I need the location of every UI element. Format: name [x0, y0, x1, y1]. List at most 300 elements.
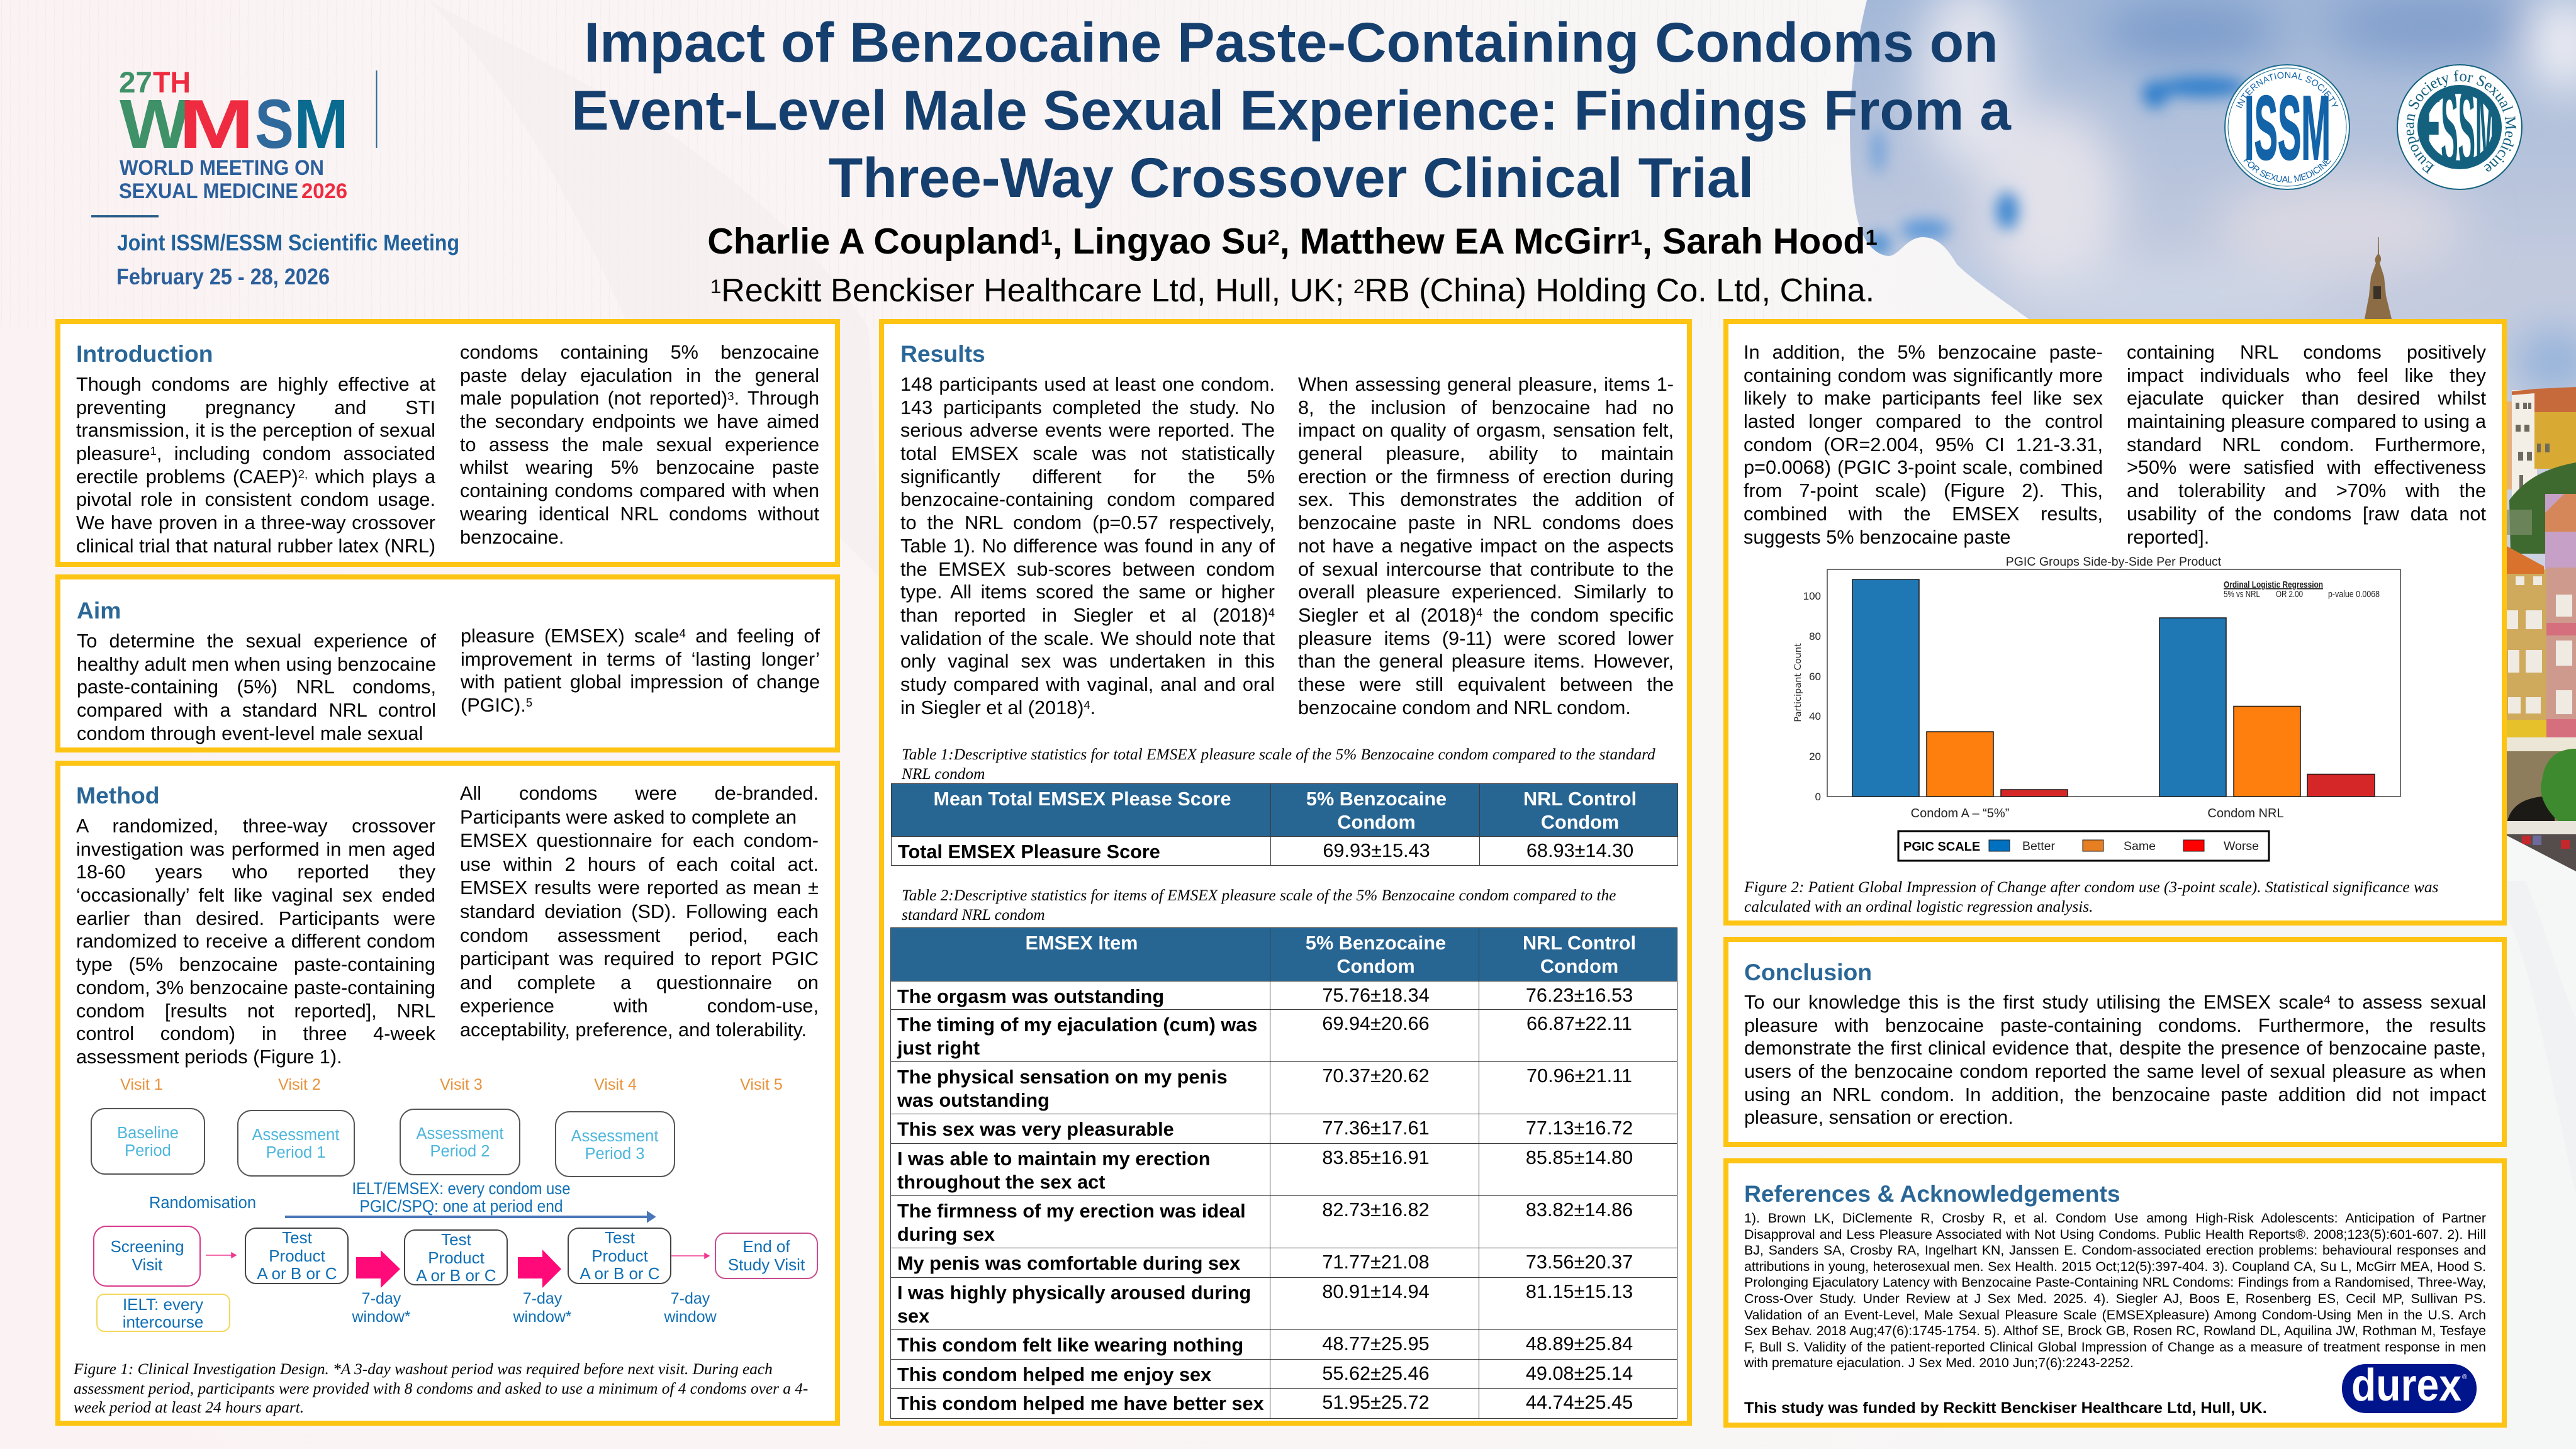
text block: results column 1: type. All items scored the same or higher [900, 581, 1275, 603]
table 2 header row: The firmness of my erection was ideal [897, 1200, 1246, 1222]
table 2 header row: This condom helped me enjoy sex [897, 1364, 1211, 1385]
background: sky, clouds and city photo treatment [451, 0, 2576, 871]
y axis label: Participant Count [1793, 643, 1803, 722]
table 2 header row: 85.85±14.80 [1526, 1147, 1633, 1168]
text block: aim column 1: paste-containing (5%) NRL condoms, [77, 676, 436, 698]
caption: figure 2: calculated with an ordinal logistic regression analysis. [1744, 897, 2093, 915]
text block: conclusion: demonstrate the first clinical evidence that, despite the presence of benzocaine paste, [1744, 1038, 2486, 1059]
text block: results column 1: serious adverse events were reported. The [900, 420, 1275, 441]
text block: method column 2: acceptability, preference, and tolerability. [460, 1019, 807, 1041]
text block: aim column 1: To determine the sexual experience of [77, 630, 436, 652]
assessment notes: IELT/EMSEX: every condom use [352, 1179, 570, 1198]
table 2 header row: This sex was very pleasurable [897, 1119, 1174, 1140]
text block: results column 1: 148 participants used at least one condom. [900, 374, 1275, 395]
heading: Introduction: Introduction [76, 340, 213, 367]
table 2 header row: 48.77±25.95 [1322, 1333, 1430, 1355]
legend: PGIC scale [1898, 831, 2269, 861]
logo: meeting dates: February 25 - 28, 2026 [116, 264, 330, 289]
text block: results column 2 [1298, 373, 1674, 719]
funding statement: This study was funded by Reckitt Benckiser Healthcare Ltd, Hull, UK. [1744, 1399, 2267, 1417]
text block: results column 1: in Siegler et al (2018)4. [900, 697, 1095, 719]
table 2 header row: NRL Control [1523, 932, 1636, 954]
visit period boxes: Baseline [117, 1124, 179, 1142]
test product boxes: A or B or C [257, 1264, 337, 1283]
text block: introduction column 2: to assess the male sexual experience [460, 434, 819, 456]
text block: introduction column 2: male population (not reported)3. Through [460, 388, 819, 409]
heading: References & Acknowledgements: References & Acknowledgements [1744, 1180, 2120, 1207]
caption: table 2: standard NRL condom [902, 906, 1045, 924]
table 2 header row: 70.37±20.62 [1322, 1065, 1430, 1087]
x axis labels: Condom A – “5%” [1911, 807, 2009, 820]
window labels [351, 1290, 717, 1326]
table 2 header row: 81.15±15.13 [1526, 1281, 1633, 1302]
caption: table 2 [902, 886, 1616, 924]
caption: table 2: Table 2:Descriptive statistics for items of EMSEX pleasure scale of the 5% Benzocaine condom compared to the [902, 887, 1616, 904]
text block: aim column 1 [77, 630, 436, 744]
text block: references: Disapproval and Less Pleasure Associated with Not Using Condoms. Public Health Reports®. 2008;123(5):601-607. 2). Hill [1744, 1227, 2486, 1242]
visit period boxes: Period 3 [585, 1145, 644, 1163]
text block: method column 1: earlier than desired. Participants were [76, 908, 435, 929]
panel: introduction [55, 319, 840, 567]
visit labels: Visit 4 [594, 1076, 637, 1094]
window labels: window* [512, 1308, 572, 1326]
table 2 header row: sex [897, 1306, 929, 1327]
text block: introduction column 1: Though condoms are highly effective at [76, 374, 435, 395]
text block: continued column 2: impact individuals who feel like they [2127, 365, 2486, 386]
y axis ticks: 100 [1803, 590, 1821, 602]
text block: results column 1: to the NRL condom (p=0.57 respectively, [900, 512, 1275, 534]
text block: results column 2: not have a negative impact on the aspects [1298, 535, 1674, 557]
table 2 header row: This condom helped me have better sex [897, 1393, 1264, 1414]
text block: results column 1: Table 1). No difference was found in any of [900, 535, 1275, 557]
text block: continued column 1: condom (OR=2.004, 95% CI 1.21-3.31, [1744, 434, 2103, 456]
table 2 header row: 66.87±22.11 [1526, 1013, 1632, 1034]
text block: references: attributions in young, heterosexual men. Sex Health. 2015 Oct;12(5):397-404. 3). Coupland CA, Su L, McGirr MEA, Hood S. [1744, 1259, 2486, 1274]
visit period boxes [91, 1109, 675, 1177]
end of study box: End of [742, 1237, 790, 1256]
visit period boxes: Assessment [252, 1126, 339, 1144]
visit period boxes: Period 1 [266, 1144, 325, 1161]
window labels: 7-day [523, 1290, 563, 1307]
logo: world meeting text: SEXUAL MEDICINE [119, 179, 298, 203]
text block: introduction column 1: pleasure1, including condom associated [76, 443, 435, 464]
table 2 header row: Condom [1336, 956, 1415, 977]
text block: continued column 2: standard NRL condom. Furthermore, [2127, 434, 2486, 456]
text block: method column 1: control condom) in three 4-week [76, 1023, 435, 1044]
text block: introduction column 1 [76, 374, 435, 557]
table 2 header row: Condom [1540, 956, 1618, 977]
caption: figure 1 [74, 1360, 808, 1417]
bar chart: PGIC groups side-by-side per product [1787, 552, 2473, 870]
table 2 header row: 51.95±25.72 [1322, 1392, 1430, 1413]
table 1 header row [891, 784, 1677, 866]
text block: results column 1: only vaginal sex was undertaken in this [900, 651, 1275, 672]
visit period boxes: Assessment [571, 1127, 658, 1145]
text block: method column 1: randomized to receive a different condom [76, 931, 435, 952]
text block: results column 2: Siegler et al (2018)4 the condom specific [1298, 605, 1674, 626]
text block: introduction column 2: whilst wearing 5% benzocaine paste [460, 457, 819, 478]
test product boxes [245, 1228, 671, 1285]
text block: continued column 2: reported]. [2127, 526, 2209, 547]
text block: method column 2: EMSEX questionnaire for each condom- [460, 830, 819, 851]
table 2 header row: 55.62±25.46 [1322, 1363, 1430, 1384]
buildings [2507, 401, 2512, 490]
text block: aim column 2: pleasure (EMSEX) scale4 and feeling of [461, 625, 820, 647]
table 2 header row: just right [897, 1038, 980, 1059]
test product boxes: Test [441, 1230, 472, 1249]
visit period boxes: Assessment [417, 1125, 503, 1143]
text block: method column 2: use within 2 hours of each coital act. [460, 854, 819, 875]
text block: introduction column 1: transmission, it is the perception of sexual [76, 420, 435, 441]
tower [2365, 237, 2392, 319]
test product boxes: Product [591, 1246, 649, 1265]
screening visit box: Screening [110, 1237, 184, 1256]
text block: results column 1: 143 participants completed the study. No [900, 397, 1275, 418]
table 2 header row: I was highly physically aroused during [897, 1282, 1251, 1304]
text block: method column 2: Participants were asked to complete an [460, 807, 797, 828]
text block: method column 2: All condoms were de-branded. [460, 783, 819, 804]
logo: world meeting text: 2026 [301, 179, 347, 203]
text block: results column 2: these were still equivalent between the [1298, 674, 1674, 695]
text block: method column 1: 18-60 years who reported they [76, 861, 435, 883]
text block: continued column 1: In addition, the 5% benzocaine paste- [1744, 342, 2103, 363]
title: Three-Way Crossover Clinical Trial [829, 146, 1754, 209]
text block: introduction column 2: the secondary endpoints we have aimed [460, 411, 819, 432]
window labels: window* [351, 1308, 411, 1326]
icon: ISSM logo: FOR SEXUAL MEDICINE [2244, 159, 2331, 182]
text block: method column 1: investigation was performed in men aged [76, 839, 435, 860]
text block: aim column 2 [461, 625, 820, 716]
logo: world meeting text: WORLD MEETING ON [120, 156, 324, 180]
table 2 item rows: 76.23±16.53 [1526, 985, 1633, 1006]
text block: references: Sex Behav. 2018 Aug;47(6):1745-1754. 5). Althof SE, Brock GB, Rosen RC, Rowland DL, Aquilina JW, Rothman M, Tesfaye [1744, 1323, 2486, 1338]
heading: Results: Results [900, 340, 985, 367]
regression annotation: 5% vs NRL [2224, 589, 2260, 600]
screening visit box [94, 1226, 200, 1286]
test product boxes: Product [428, 1248, 485, 1267]
text block: method column 2: EMSEX results were reported as mean ± [460, 877, 819, 898]
legend: PGIC scale: Better [2022, 839, 2056, 853]
text block: results column 1 [900, 373, 1275, 719]
logo: WMSM wordmark: M [294, 86, 349, 163]
icon: durex logo: ® [2462, 1373, 2467, 1381]
legend: PGIC scale: PGIC SCALE [1903, 840, 1980, 854]
text block: results column 2: than the general pleasure items. However, [1298, 651, 1674, 672]
table 2 header row: 71.77±21.08 [1322, 1251, 1430, 1273]
table 1 header row: Mean Total EMSEX Please Score [933, 788, 1231, 810]
text block: references: with premature ejaculation. J Sex Med. 2010 Jun;7(6):2243-2252. [1744, 1355, 2134, 1370]
table 2 header row: 77.36±17.61 [1322, 1117, 1430, 1139]
text block: introduction column 1: We have proven in a three-way crossover [76, 512, 435, 534]
arrow: screening to test product [206, 1253, 236, 1258]
caption: figure 1: assessment period, participants were provided with 8 condoms and asked to use a minimum of 4 condoms over a 4- [74, 1379, 808, 1397]
text block: references: F, Bull S. Validity of the patient-reported Clinical Global Impression of Change as a measure of treatment response in men [1744, 1340, 2486, 1355]
table 2 header row: My penis was comfortable during sex [897, 1253, 1240, 1274]
table 2 header row: 69.94±20.66 [1322, 1013, 1430, 1034]
test product boxes: Test [605, 1228, 636, 1247]
text block: continued column 2: maintaining pleasure compared to using a [2127, 411, 2486, 432]
text block: method column 1: A randomized, three-way crossover [76, 815, 435, 837]
test product boxes: Test [282, 1228, 313, 1247]
panel: results continued and figure 2 [1723, 319, 2507, 926]
table 2 header row [891, 927, 1677, 1418]
test product boxes: A or B or C [580, 1264, 660, 1283]
text block: results column 2: impact on quality of orgasm, sensation felt, [1298, 420, 1674, 441]
text block: continued column 1 [1744, 341, 2103, 549]
logo: 27TH numeral: TH [153, 65, 191, 99]
y axis ticks: 80 [1809, 630, 1821, 642]
table 1 data row: 69.93±15.43 [1323, 840, 1430, 861]
text block: aim column 1: healthy adult men when using benzocaine [77, 654, 436, 675]
visit labels: Visit 3 [440, 1076, 483, 1094]
bars: condom A 5% [1852, 579, 2068, 797]
text block: aim column 2: with patient global impression of change [461, 671, 820, 693]
text block: aim column 2: improvement in terms of ‘lasting longer’ [461, 649, 820, 670]
end of study box [715, 1233, 817, 1278]
text block: aim column 2: (PGIC).5 [461, 695, 532, 716]
text block: continued column 2: containing NRL condoms positively [2127, 342, 2486, 363]
window labels: 7-day [362, 1290, 401, 1307]
x axis labels [1911, 807, 2284, 820]
logo: WMSM wordmark: W [120, 86, 190, 163]
text block: continued column 1: p=0.0068) (PGIC 3-point scale, combined [1744, 457, 2103, 478]
text block: introduction column 1: preventing pregnancy and STI [76, 397, 435, 418]
logo: 27TH numeral: 27 [119, 65, 152, 99]
text block: continued column 2: ejaculate quicker than desired whilst [2127, 388, 2486, 409]
table 2 item rows [891, 982, 1677, 1009]
text block: results column 1: total EMSEX scale was not statistically [900, 443, 1275, 464]
caption: figure 1: Figure 1: Clinical Investigation Design. *A 3-day washout period was required before next visit. During each [74, 1360, 773, 1378]
heading: Conclusion: Conclusion [1744, 959, 1872, 985]
title: Impact of Benzocaine Paste-Containing Condoms on [584, 11, 1998, 74]
table 2 header row: was outstanding [897, 1090, 1050, 1111]
randomisation label: Randomisation [149, 1194, 256, 1212]
caption: table 1 [902, 745, 1655, 783]
visit labels: Visit 5 [740, 1076, 783, 1094]
legend: PGIC scale: Worse [2224, 839, 2259, 853]
visit period boxes: Period 2 [430, 1143, 490, 1160]
arrow: block arrows between products [356, 1250, 561, 1288]
text block: introduction column 2: containing condoms compared with when [460, 480, 819, 501]
logo: world meeting text [119, 156, 347, 203]
text block: results column 1: the EMSEX sub-scores between condom [900, 559, 1275, 580]
regression annotation [2224, 579, 2380, 600]
icon: ISSM and ESSM society logos [2224, 64, 2523, 190]
text block: introduction column 1: clinical trial that natural rubber latex (NRL) [76, 535, 435, 557]
text block: conclusion: pleasure with benzocaine paste-containing condoms. Furthermore, the results [1744, 1015, 2486, 1036]
text block: references: Prolonging Ejaculatory Latency with Benzocaine Paste-Containing NRL Condoms: Findings from a Randomised, Three-Way, [1744, 1275, 2486, 1290]
visit labels [120, 1076, 783, 1094]
table 2 header row: EMSEX Item [1026, 932, 1138, 954]
text block: results column 2: overall pleasure experienced. Similarly to [1298, 581, 1674, 603]
panel: references and acknowledgements [1723, 1158, 2507, 1428]
text block: continued column 2 [2127, 341, 2486, 549]
text block: results column 2: When assessing general pleasure, items 1- [1298, 374, 1674, 395]
table 2 header row: 82.73±16.82 [1322, 1199, 1430, 1221]
table 2 header row: during sex [897, 1224, 995, 1245]
text block: method column 1 [76, 815, 435, 1069]
text block: continued column 1: containing condom was significantly more [1744, 365, 2103, 386]
logo: WMSM wordmark [120, 86, 349, 163]
legend: PGIC scale: Same [2124, 839, 2156, 853]
table 1 data row: 68.93±14.30 [1526, 840, 1633, 861]
IELT note box: IELT: every [123, 1295, 203, 1314]
text block: results column 1: than reported in Siegler et al (2018)4 [900, 605, 1275, 626]
text block: results column 2: erection or the firmness of erection during [1298, 466, 1674, 488]
regression annotation: Ordinal Logistic Regression [2224, 579, 2323, 590]
text block: conclusion: using an NRL condom. In addition, the benzocaine paste addition did not impact [1744, 1084, 2486, 1105]
text block: method column 1: type (5% benzocaine paste-containing [76, 954, 435, 975]
affiliations: 1Reckitt Benckiser Healthcare Ltd, Hull, UK; 2RB (China) Holding Co. Ltd, China. [710, 272, 1874, 309]
text block: introduction column 2: paste delay ejaculation in the general [460, 365, 819, 386]
caption: table 1: NRL condom [902, 765, 985, 783]
text block: results column 1: benzocaine-containing condom compared [900, 489, 1275, 510]
regression annotation: p-value 0.0068 [2328, 589, 2380, 600]
text block: introduction column 2: benzocaine. [460, 526, 564, 547]
caption: table 1: Table 1:Descriptive statistics for total EMSEX pleasure scale of the 5% Benzocaine condom compared to the standard [902, 746, 1655, 763]
table 2: EMSEX items [890, 927, 1677, 1419]
table 2 header row: 70.96±21.11 [1526, 1065, 1632, 1087]
icon: ISSM and ESSM society logos: ISSM [2244, 77, 2331, 179]
table 2 header row: This condom felt like wearing nothing [897, 1334, 1243, 1356]
heading: Method: Method [76, 782, 160, 808]
arrow: final product to end of study [671, 1253, 709, 1258]
IELT note box [97, 1294, 230, 1331]
text block: references: Validation of an Event-Level, Male Sexual Pleasure Scale (EMSEXpleasure) Among Condom-Using Men in the U.S. Arch [1744, 1307, 2486, 1323]
logo: 27th WMSM conference mark and dates [91, 65, 459, 289]
text block: results column 2: sex. This demonstrates the addition of [1298, 489, 1674, 510]
table 1: total EMSEX score [891, 783, 1678, 866]
panel: method [55, 761, 840, 1426]
text block: results column 2: benzocaine paste in NRL condoms does [1298, 512, 1674, 534]
table 2 header row: 5% Benzocaine [1306, 932, 1446, 954]
text block: continued column 1: likely to make participants feel like sex [1744, 388, 2103, 409]
window labels: window [663, 1308, 717, 1326]
text block: results column 2: general pleasure, ability to maintain [1298, 443, 1674, 464]
bars: condom NRL [2159, 618, 2375, 797]
caption: figure 2: Figure 2: Patient Global Impression of Change after condom use (3-point scale). Statistical significance was [1744, 878, 2438, 896]
text block: conclusion: To our knowledge this is the first study utilising the EMSEX scale4 to assess sexual [1744, 992, 2486, 1013]
table 2 header row: 80.91±14.94 [1322, 1281, 1430, 1302]
table 1 header row: 5% Benzocaine [1306, 788, 1447, 810]
table 2 header row: I was able to maintain my erection [897, 1148, 1210, 1170]
text block: method column 2: experience with condom-use, [460, 995, 819, 1017]
chart title: PGIC Groups Side-by-Side Per Product [2006, 555, 2222, 569]
table 2 header row: The physical sensation on my penis [897, 1066, 1228, 1088]
text block: continued column 1: lasted longer compared to the control [1744, 411, 2103, 432]
y axis ticks: 60 [1809, 671, 1821, 683]
table 1 data row: Total EMSEX Pleasure Score [898, 841, 1160, 863]
text block: method column 1: ‘occasionally’ felt like vaginal sex ended [76, 885, 435, 906]
text block: references: BJ, Sanders SA, Crosby RA, Ingelhart KN, Janssen E. Condom-associated erection problems: behavioural responses and [1744, 1243, 2486, 1258]
text block: results column 1: study compared with vaginal, anal and oral [900, 674, 1275, 695]
panel: conclusion [1723, 937, 2507, 1147]
table 2 item rows: 75.76±18.34 [1322, 985, 1430, 1006]
text block: continued column 1: suggests 5% benzocaine paste [1744, 526, 2010, 547]
flow diagram: clinical investigation design [74, 1070, 822, 1340]
authors: Charlie A Coupland1, Lingyao Su2, Matthew EA McGirr1, Sarah Hood1 [707, 221, 1878, 262]
heading: Aim: Aim [77, 597, 121, 624]
visit labels: Visit 2 [278, 1076, 321, 1094]
text block: method column 1: condom [results not reported], NRL [76, 1000, 435, 1022]
table 2 header row: 83.85±16.91 [1322, 1147, 1430, 1168]
screening visit box: Visit [132, 1255, 163, 1274]
text block: method column 2: participant was required to report PGIC [460, 948, 819, 970]
table 1 data row [891, 837, 1677, 866]
text block: results column 2: benzocaine condom and NRL condom. [1298, 697, 1631, 719]
text block: conclusion [1744, 991, 2486, 1129]
text block: results column 1: validation of the scale. We should note that [900, 628, 1275, 649]
text block: conclusion: users of the benzocaine condom reported the same level of sexual pleasure as when [1744, 1061, 2486, 1082]
text block: continued column 1: combined with the EMSEX results, [1744, 503, 2103, 525]
x axis labels: Condom NRL [2207, 807, 2284, 820]
y axis ticks [1803, 590, 1821, 803]
logo: WMSM wordmark: M [179, 86, 254, 163]
table 2 header row: 73.56±20.37 [1526, 1251, 1633, 1273]
assessment notes [352, 1179, 570, 1216]
panel: results [879, 319, 1692, 1426]
logo: 27TH numeral [119, 65, 191, 99]
table 1 header row: Condom [1337, 812, 1416, 833]
IELT note box: intercourse [123, 1312, 203, 1331]
end of study box: Study Visit [728, 1255, 805, 1274]
test product boxes: A or B or C [416, 1266, 496, 1285]
panel: aim [55, 574, 840, 752]
assessment notes: PGIC/SPQ: one at period end [360, 1197, 563, 1216]
text block: conclusion: pleasure, sensation or erection. [1744, 1107, 2013, 1128]
table 2 header row: 77.13±16.72 [1526, 1117, 1633, 1139]
table 2 header row: throughout the sex act [897, 1172, 1105, 1193]
test product boxes: Product [269, 1246, 326, 1265]
text block: continued column 1: from 7-point scale) (Figure 2). This, [1744, 480, 2103, 501]
text block: method column 2: standard deviation (SD). Following each [460, 901, 819, 922]
text block: results column 2: pleasure items (9-11) were scored lower [1298, 628, 1674, 649]
text block: results column 2: 8, the inclusion of benzocaine had no [1298, 397, 1674, 418]
table 1 header row: Condom [1541, 812, 1619, 833]
text block: introduction column 2: condoms containing 5% benzocaine [460, 342, 819, 363]
regression annotation: OR 2.00 [2276, 589, 2303, 600]
y axis ticks: 0 [1815, 791, 1821, 803]
icon: ISSM logo [2224, 64, 2350, 190]
table 1 header row: NRL Control [1523, 788, 1637, 810]
text block: references: 1). Brown LK, DiClemente R, Crosby R, et al. Condom Use among High-Risk Adolescents: Anticipation of Partner [1744, 1211, 2486, 1226]
text block: continued column 2: >50% were satisfied with effectiveness [2127, 457, 2486, 478]
text block: method column 2 [460, 782, 819, 1043]
window labels: 7-day [671, 1290, 710, 1307]
title [571, 11, 2011, 209]
text block: method column 2: and complete a questionnaire on [460, 972, 819, 993]
y axis ticks: 40 [1809, 710, 1821, 722]
text block: references: Cross-Over Study. Under Review at J Sex Med. 2025. 4). Siegler AJ, Boos E, Rosenberg ES, Cecil MP, Sullivan PS. [1744, 1291, 2486, 1306]
text block: references [1744, 1211, 2486, 1372]
table 2 header row: 49.08±25.14 [1526, 1363, 1633, 1384]
text block: introduction column 1: erectile problems (CAEP)2, which plays a [76, 466, 435, 488]
table 2 header row: The timing of my ejaculation (cum) was [897, 1014, 1257, 1036]
visit labels: Visit 1 [120, 1076, 163, 1094]
visit period boxes: Period [125, 1142, 171, 1160]
caption: figure 2 [1744, 878, 2438, 916]
text block: aim column 1: condom through event-level male sexual [77, 723, 423, 744]
text block: results column 2: of sexual intercourse that contribute to the [1298, 559, 1674, 580]
text block: introduction column 2 [460, 342, 819, 547]
text block: introduction column 1: pivotal role in consistent condom usage. [76, 489, 435, 510]
text block: method column 1: assessment periods (Figure 1). [76, 1046, 342, 1068]
icon: ISSM logo: INTERNATIONAL SOCIETY [2236, 72, 2339, 108]
logo: WMSM wordmark: S [255, 86, 294, 163]
text block: continued column 2: and tolerability and >70% with the [2127, 480, 2486, 501]
text block: results column 1: significantly different for the 5% [900, 466, 1275, 488]
title: Event-Level Male Sexual Experience: Findings From a [571, 78, 2011, 141]
